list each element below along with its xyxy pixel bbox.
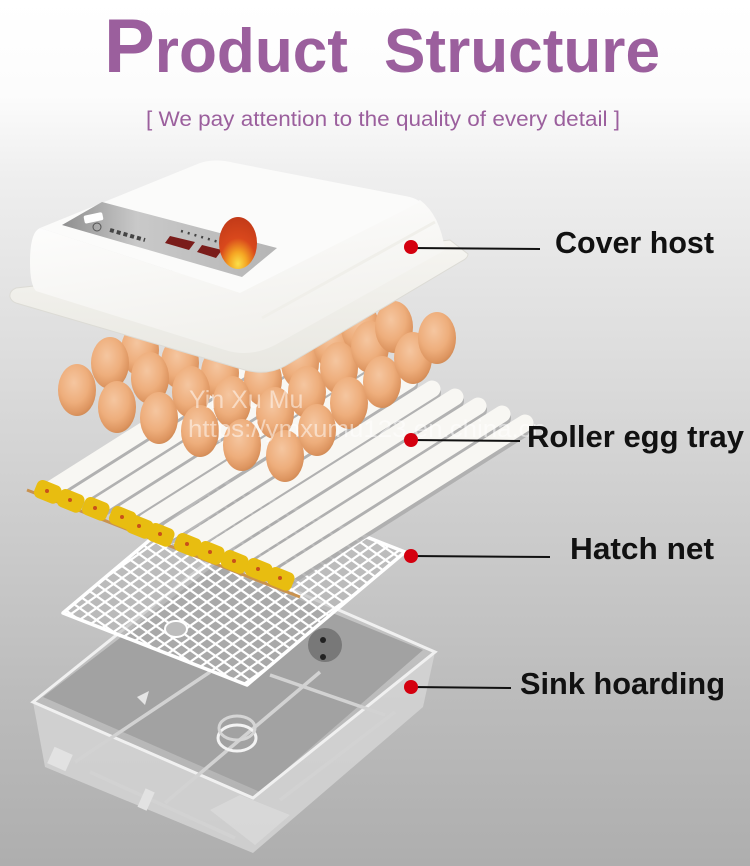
small clip [137,691,149,705]
bottom grid detail [210,795,290,845]
tray rim [33,556,435,798]
handle slot [83,212,104,224]
roller shadows [53,341,525,578]
rear eggs [121,301,379,406]
cover flange [10,240,468,372]
cover body [30,200,445,353]
callout: hatch net [404,531,714,566]
watermark: Yin Xu Mu [189,386,303,414]
callout: hatch net: Hatch net [570,531,714,566]
roller egg tray [27,337,525,597]
title [104,4,660,89]
tray outer walls [33,652,435,853]
cap centres [45,489,282,580]
red displays [165,236,195,250]
callout: cover host: Cover host [555,225,714,260]
cover host [10,160,468,372]
callout: sink hoarding: Sink hoarding [520,666,725,701]
middle row eggs [91,301,413,439]
wall clips [47,747,155,811]
watermark: https://ymxumu123.en.china.cn [188,416,546,443]
icons [110,230,145,240]
cover top surface [40,160,420,293]
yellow roller caps [32,478,296,593]
roller base strip [27,490,300,597]
tray floor [43,565,423,792]
status dots [181,231,222,243]
cover side groove [262,222,435,318]
hatch net [63,480,405,685]
callout: sink hoarding [404,666,725,701]
tray ribs [75,672,395,838]
callout: roller egg tray: Roller egg tray [527,419,745,454]
watermark [188,386,546,443]
eggs [58,301,456,482]
rollers [53,337,525,574]
candled egg [219,217,257,269]
subtitle: [ We pay attention to the quality of every detail ] [146,108,620,131]
front row eggs [58,312,456,482]
callout: cover host [404,225,714,260]
title: Structure [384,17,660,86]
title: Product [104,4,348,89]
control panel [62,202,277,277]
callout: roller egg tray [404,419,745,454]
fan motor [308,628,342,662]
central ring [218,716,256,751]
sink hoarding tray [33,556,435,853]
power button [93,223,101,231]
